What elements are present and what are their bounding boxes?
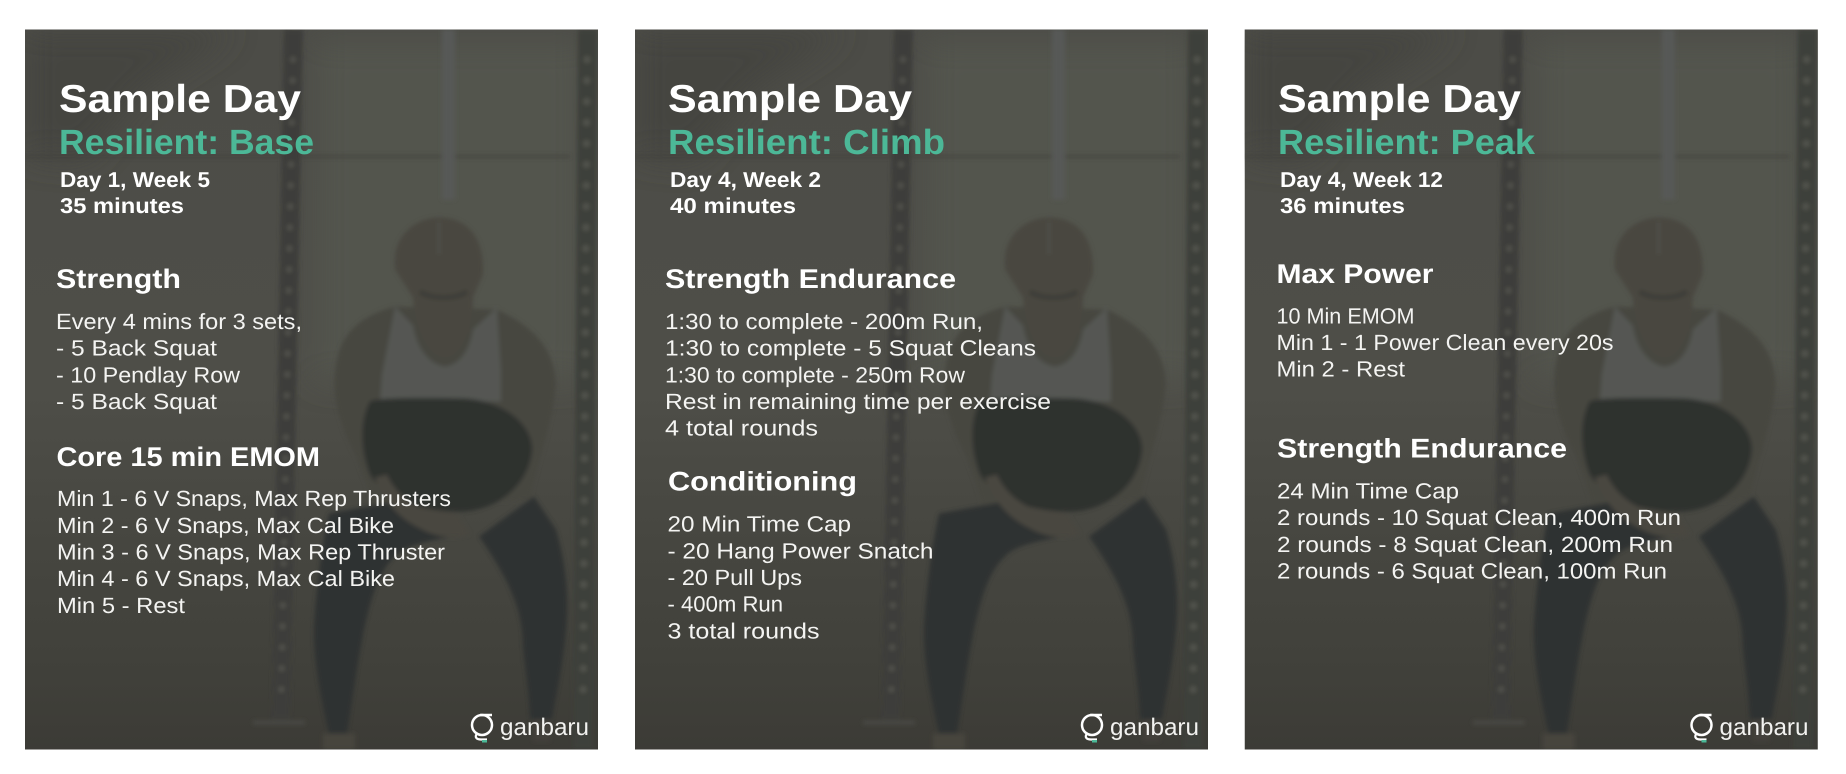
text block: Strength Endurance workout: 2 rounds - 8 Squat Clean, 200m Run bbox=[1277, 532, 1673, 557]
text block: Strength Endurance workout: 1:30 to complete - 250m Row bbox=[665, 362, 965, 387]
text block: Strength Endurance workout: 2 rounds - 6 Squat Clean, 100m Run bbox=[1277, 559, 1667, 584]
text block: Conditioning workout: - 20 Hang Power Snatch bbox=[668, 538, 934, 563]
text block: Core workout: Min 3 - 6 V Snaps, Max Rep Thruster bbox=[57, 540, 445, 564]
text block: Strength Endurance workout: Rest in remaining time per exercise bbox=[665, 389, 1051, 414]
text block: Core workout bbox=[57, 486, 451, 618]
day and duration: 40 minutes bbox=[670, 194, 796, 218]
text block: Conditioning workout: - 400m Run bbox=[668, 592, 783, 617]
day and duration: 36 minutes bbox=[1280, 194, 1405, 218]
title: Sample Day bbox=[668, 78, 912, 121]
text block: Strength Endurance workout: 1:30 to complete - 5 Squat Cleans bbox=[665, 336, 1036, 361]
title: Sample Day bbox=[1278, 78, 1521, 121]
text block: Conditioning workout: 3 total rounds bbox=[668, 618, 820, 643]
text block: Strength workout: - 5 Back Squat bbox=[56, 336, 217, 361]
text block: Strength Endurance workout: 2 rounds - 10 Squat Clean, 400m Run bbox=[1277, 505, 1681, 530]
text block: Strength Endurance workout: 4 total rounds bbox=[665, 416, 818, 441]
text block: Core workout: Min 2 - 6 V Snaps, Max Cal Bike bbox=[57, 513, 394, 538]
text block: Strength Endurance workout bbox=[665, 309, 1051, 441]
logo: ganbaru: ganbaru bbox=[1720, 714, 1808, 741]
day and duration: Day 1, Week 5 bbox=[60, 168, 210, 192]
text block: Conditioning workout: 20 Min Time Cap bbox=[668, 512, 851, 537]
program subtitle: Resilient: Base bbox=[59, 123, 314, 162]
text block: Strength Endurance workout: 1:30 to complete - 200m Run, bbox=[665, 309, 983, 334]
heading: Max Power: Max Power bbox=[1276, 259, 1434, 289]
text block: Conditioning workout bbox=[668, 512, 934, 643]
title: Sample Day bbox=[59, 78, 301, 121]
text block: Strength workout bbox=[56, 309, 302, 414]
text block: Core workout: Min 1 - 6 V Snaps, Max Rep Thrusters bbox=[57, 486, 451, 511]
text block: Strength Endurance workout bbox=[1277, 479, 1681, 584]
heading: Strength: Strength bbox=[56, 264, 181, 294]
day and duration bbox=[1280, 168, 1443, 218]
day and duration: 35 minutes bbox=[60, 194, 184, 218]
panel background photo bbox=[1244, 30, 1818, 750]
panel: Resilient Climb bbox=[635, 30, 1208, 750]
panel background photo bbox=[25, 30, 598, 750]
text block: Max Power workout bbox=[1276, 304, 1614, 382]
text block: Strength workout: Every 4 mins for 3 sets, bbox=[56, 309, 302, 334]
text block: Core workout: Min 4 - 6 V Snaps, Max Cal Bike bbox=[57, 566, 395, 591]
logo: ganbaru: ganbaru bbox=[500, 714, 589, 741]
text block: Strength Endurance workout: 24 Min Time Cap bbox=[1277, 479, 1459, 504]
text block: Max Power workout: Min 2 - Rest bbox=[1276, 357, 1405, 382]
logo: ganbaru: ganbaru bbox=[1110, 714, 1199, 741]
heading: Core: Core 15 min EMOM bbox=[56, 442, 320, 472]
text block: Max Power workout: Min 1 - 1 Power Clean every 20s bbox=[1276, 330, 1614, 355]
text block: Strength workout: - 5 Back Squat bbox=[56, 389, 217, 414]
day and duration: Day 4, Week 12 bbox=[1280, 168, 1443, 192]
day and duration: Day 4, Week 2 bbox=[670, 168, 821, 192]
panel: Resilient Peak bbox=[1245, 30, 1818, 750]
text block: Max Power workout: 10 Min EMOM bbox=[1276, 304, 1414, 328]
text block: Core workout: Min 5 - Rest bbox=[57, 593, 185, 618]
program subtitle: Resilient: Climb bbox=[668, 123, 945, 162]
panel: Resilient Base bbox=[25, 30, 598, 750]
program subtitle: Resilient: Peak bbox=[1278, 123, 1536, 162]
text block: Conditioning workout: - 20 Pull Ups bbox=[668, 565, 802, 590]
heading: Conditioning: Conditioning bbox=[668, 467, 857, 497]
text block: Strength workout: - 10 Pendlay Row bbox=[56, 362, 240, 387]
panel background photo bbox=[635, 30, 1208, 750]
heading: Strength Endurance: Strength Endurance bbox=[1277, 434, 1567, 464]
day and duration bbox=[60, 168, 210, 218]
day and duration bbox=[670, 168, 821, 218]
heading: Strength Endurance: Strength Endurance bbox=[665, 264, 956, 294]
